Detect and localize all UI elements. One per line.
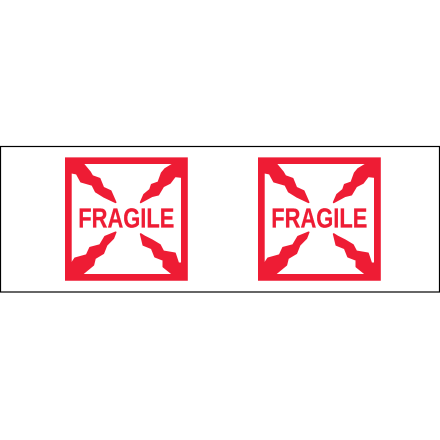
label text: FRAGILE bbox=[78, 202, 174, 234]
fragile label: left bbox=[65, 157, 188, 281]
icon: crack arrows, left label bbox=[71, 163, 182, 275]
label text: FRAGILE bbox=[271, 202, 367, 234]
label frame bbox=[65, 157, 188, 281]
tape outline bbox=[0, 146, 440, 292]
icon: crack arrows, right label bbox=[264, 163, 375, 275]
label frame bbox=[258, 157, 381, 281]
fragile label: right bbox=[258, 157, 381, 281]
